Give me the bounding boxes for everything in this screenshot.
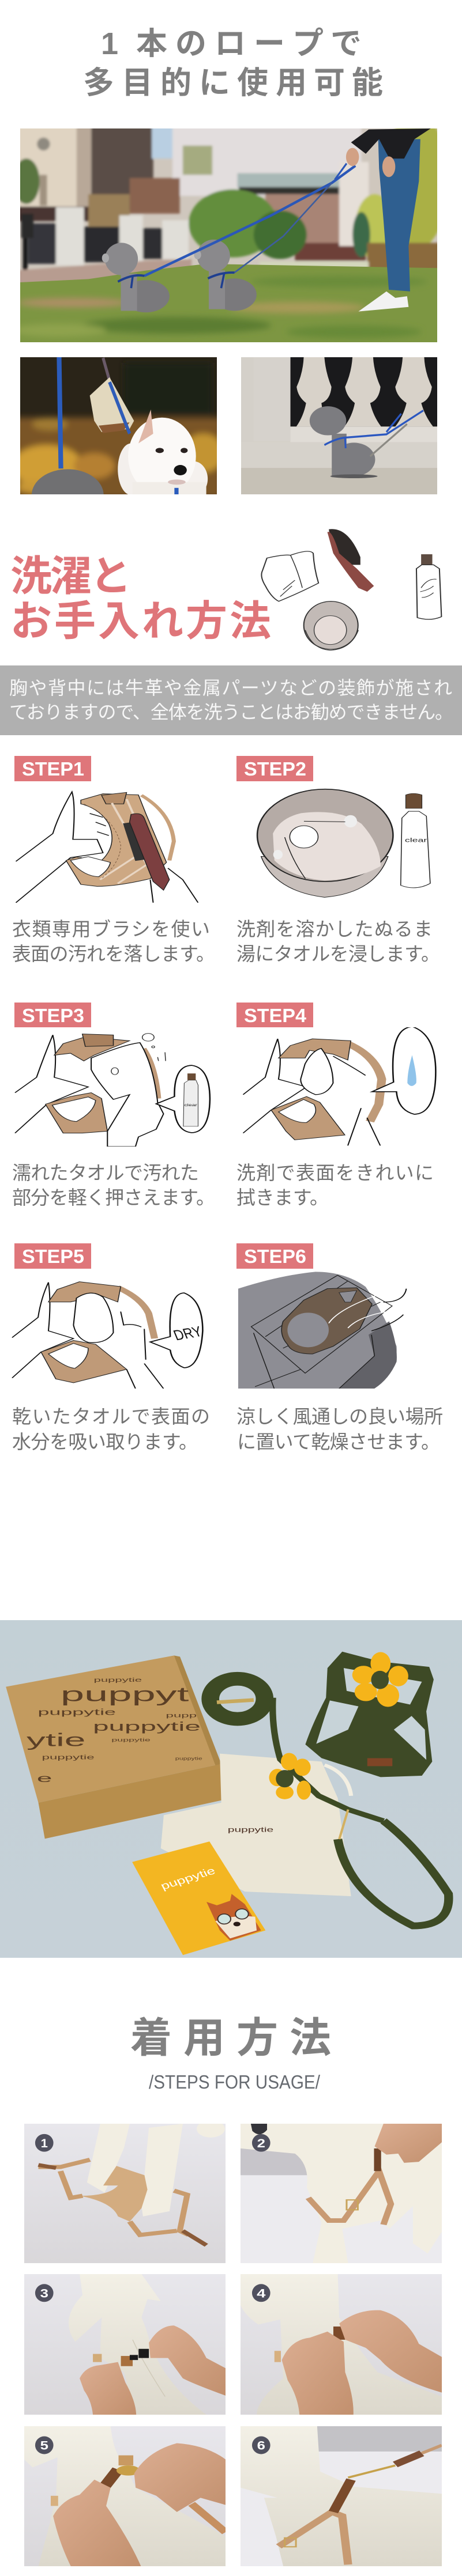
cardboard box: e — [37, 1772, 52, 1784]
illustration: step 1 brushing harness — [15, 790, 198, 903]
step 5 label — [14, 1243, 91, 1269]
harness flat on floor — [39, 2160, 206, 2245]
wire rack — [251, 1275, 392, 1389]
step 1 text: 衣類専用ブラシを使い — [12, 918, 210, 940]
step 2 text: 洗剤を溶かしたぬるま — [236, 918, 433, 940]
leash lines — [57, 357, 110, 468]
step 3 text — [12, 1162, 215, 1208]
balusters — [296, 357, 433, 426]
heading: 着用方法: 着用方法 — [130, 2015, 331, 2061]
notice text: ておりますので、全体を洗うことはお勧めできません。 — [9, 702, 453, 723]
yellow brochure — [132, 1841, 265, 1955]
dog 2 — [194, 240, 257, 311]
pouch — [90, 377, 134, 434]
harness with leash — [279, 2445, 442, 2564]
right hand lines — [121, 1311, 163, 1389]
step 2 text — [236, 918, 440, 964]
white poodle — [118, 410, 208, 497]
step 6 text — [236, 1406, 443, 1452]
number badge 3: 3 — [40, 2286, 48, 2300]
soap bubbles — [142, 1034, 166, 1061]
illustration: step 2 bowl and detergent — [256, 788, 431, 898]
harness — [46, 1034, 159, 1133]
towel — [261, 551, 318, 602]
number badge 2: 2 — [257, 2136, 265, 2150]
photo: product set with box, leash, harness, bag and card — [0, 1620, 462, 1958]
mannequin — [241, 2274, 442, 2415]
cardboard box: pupp — [166, 1712, 197, 1719]
step 6 text: に置いて乾燥させます。 — [237, 1431, 440, 1452]
step 3 text: 部分を軽く押さえます。 — [12, 1187, 215, 1208]
number badge 4 — [252, 2284, 271, 2302]
person: jeans, jacket, sneakers — [346, 128, 431, 312]
step 2 label — [236, 756, 313, 781]
leash — [324, 410, 423, 456]
detergent bottle — [401, 793, 430, 888]
photo: gray poodle by stone balustrade — [241, 357, 437, 494]
right hand lines — [150, 868, 198, 903]
cardboard box: puppytie — [93, 1720, 201, 1734]
mannequin — [241, 2426, 442, 2566]
cotton bag: puppytie — [228, 1826, 274, 1833]
usage step 6 photo — [241, 2426, 442, 2566]
hand — [374, 2124, 442, 2163]
step 5 label: STEP5 — [22, 1246, 84, 1267]
subtitle: /STEPS FOR USAGE/: /STEPS FOR USAGE/ — [149, 2071, 321, 2093]
number badge 2 — [252, 2134, 271, 2152]
right hand lines — [333, 1056, 380, 1145]
hands — [53, 2443, 226, 2566]
gray background blob — [238, 1272, 397, 1389]
harness — [309, 2148, 391, 2225]
step 4 text: 洗剤で表面をきれいに — [236, 1162, 434, 1183]
cardboard box: puppytie — [42, 1753, 95, 1761]
mannequin — [69, 2274, 206, 2415]
heading: 洗濯とお手入れ方法 — [10, 554, 271, 645]
number badge 1: 1 — [41, 2136, 48, 2150]
hands — [80, 2325, 226, 2415]
brush bristles and handle — [123, 814, 170, 890]
illustration: step 6 drying on rack — [238, 1272, 407, 1389]
usage step 4 photo — [241, 2274, 442, 2415]
usage step 1 photo — [24, 2124, 226, 2263]
yellow flower on leash — [269, 1753, 311, 1800]
cardboard box: puppytie — [94, 1676, 142, 1684]
gray dog head — [32, 469, 104, 521]
left hand — [12, 1283, 73, 1378]
detergent bottle: clear — [405, 837, 427, 843]
bowl — [257, 789, 393, 897]
bottle — [416, 554, 441, 619]
illustration: care tools — [261, 529, 442, 651]
illustration: step 3 pressing wet towel — [14, 1033, 211, 1147]
photo: two poodles on lawn with double leash — [20, 128, 437, 342]
illustration: step 4 wiping with towel — [242, 1027, 437, 1145]
step 1 label — [14, 756, 91, 781]
cardboard box: ytie — [27, 1730, 85, 1750]
illustration: step 5 drying with towel — [12, 1281, 204, 1389]
usage step 3 photo — [24, 2274, 226, 2415]
speech bubble DRY — [150, 1293, 204, 1368]
step 1 text — [12, 918, 215, 964]
step 4 text: 拭きます。 — [236, 1187, 329, 1208]
number badge 1 — [35, 2134, 54, 2152]
notice text — [9, 678, 453, 723]
shiba illustration — [206, 1894, 261, 1940]
yellow flower on harness — [352, 1652, 408, 1707]
notice text: 胸や背中には牛革や金属パーツなどの装飾が施され — [9, 678, 452, 698]
cardboard box: puppytie — [111, 1738, 151, 1743]
number badge 5 — [35, 2437, 54, 2454]
speech bubble with water drop — [372, 1027, 435, 1114]
step 1 text: 表面の汚れを落します。 — [12, 943, 215, 964]
harness — [271, 1039, 382, 1140]
stone wall — [254, 357, 291, 441]
number badge 6: 6 — [257, 2439, 265, 2453]
heading: 洗濯とお手入れ方法: 洗濯と — [10, 554, 132, 600]
photo: white poodle with poop bag holder — [20, 357, 217, 494]
step 1 label: STEP1 — [22, 758, 84, 780]
towel — [301, 1049, 333, 1095]
step 3 label: STEP3 — [22, 1005, 84, 1026]
blue double leash — [118, 164, 355, 288]
step 2 label: STEP2 — [244, 758, 306, 780]
title: 1本のロープで多目的に使用可能: 多目的に使用可能 — [83, 66, 383, 100]
mannequin — [24, 2426, 226, 2566]
number badge 4: 4 — [257, 2286, 266, 2300]
usage step 2 photo — [241, 2124, 442, 2263]
brush — [328, 529, 374, 592]
wind lines — [329, 1289, 406, 1331]
step 3 label — [14, 1003, 91, 1027]
title: 1本のロープで多目的に使用可能: 1本のロープで — [101, 27, 362, 61]
speech bubble with bottle — [156, 1065, 210, 1133]
cardboard box: puppytie — [37, 1707, 116, 1717]
bowl — [304, 602, 358, 650]
left hand — [15, 1035, 88, 1133]
mannequin body — [241, 2124, 442, 2263]
heading: 洗濯とお手入れ方法: お手入れ方法 — [10, 599, 271, 645]
coiled leash — [211, 1679, 449, 1926]
cotton bag — [161, 1754, 351, 1896]
yellow brochure: puppytie — [159, 1865, 217, 1892]
mannequin legs — [87, 2120, 225, 2216]
leash and buckle — [97, 2456, 226, 2532]
cardboard box: puppyt — [61, 1683, 189, 1705]
harness — [41, 1282, 155, 1383]
dog 1 — [102, 243, 170, 312]
harness — [66, 792, 174, 886]
number badge 6 — [252, 2437, 271, 2454]
step 6 text: 涼しく風通しの良い場所 — [236, 1406, 443, 1427]
step 4 text — [236, 1162, 434, 1208]
speech bubble with bottle: clear — [184, 1103, 197, 1107]
hands with buckle — [282, 2310, 442, 2415]
step 4 label: STEP4 — [244, 1005, 307, 1026]
number badge 5: 5 — [40, 2439, 48, 2453]
step 5 text — [12, 1406, 210, 1452]
cardboard box: puppytie — [175, 1756, 203, 1761]
title: 1本のロープで多目的に使用可能 — [83, 27, 383, 100]
cardboard box — [6, 1655, 221, 1839]
dog — [310, 406, 378, 478]
steps and floor — [241, 426, 437, 494]
left hand — [16, 792, 103, 903]
gray notice band — [0, 665, 462, 735]
olive harness — [305, 1652, 434, 1777]
usage step 5 photo — [24, 2426, 226, 2566]
harness on rack — [281, 1288, 372, 1354]
buckle — [121, 2349, 149, 2366]
towel — [73, 1293, 113, 1342]
left hand — [243, 1039, 306, 1133]
lawn — [12, 264, 437, 342]
step 5 text: 水分を吸い取ります。 — [12, 1431, 198, 1452]
step 3 text: 濡れたタオルで汚れた — [12, 1162, 199, 1183]
number badge 3 — [35, 2284, 54, 2302]
step 6 label — [236, 1243, 313, 1269]
towel and right hand — [91, 1043, 164, 1147]
step 2 text: 湯にタオルを浸します。 — [236, 943, 440, 964]
fingers — [90, 814, 109, 835]
step 4 label — [236, 1003, 313, 1027]
step 5 text: 乾いたタオルで表面の — [12, 1406, 210, 1427]
step 6 label: STEP6 — [244, 1246, 306, 1267]
